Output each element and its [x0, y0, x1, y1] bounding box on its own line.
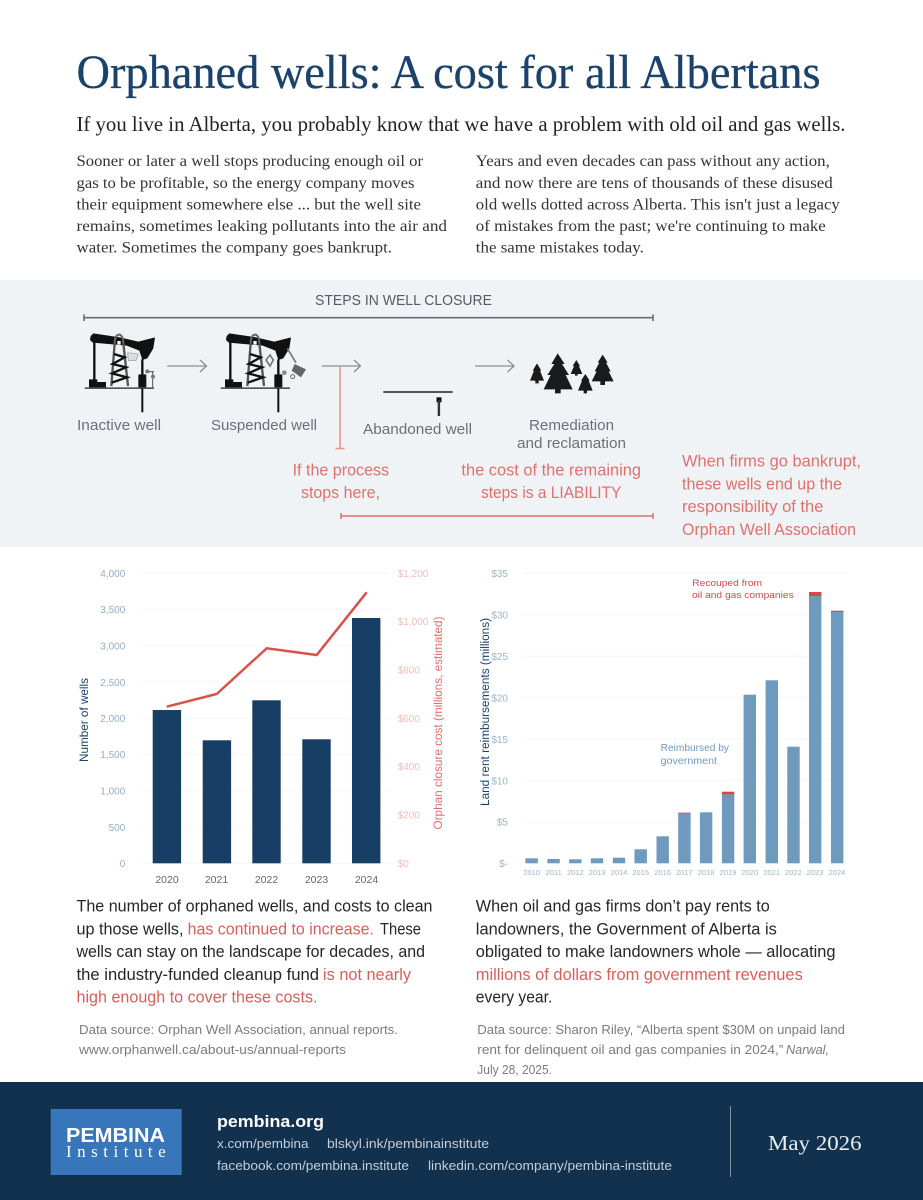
x axis labels: 2012: [567, 868, 584, 877]
text block: orphaned wells explanation: has continued to increase.: [188, 920, 374, 938]
text block: land rent explanation: millions of dollars from government revenues: [476, 966, 803, 984]
right axis labels: [398, 569, 429, 870]
date: May 2026: [768, 1131, 862, 1155]
arrow: abandoned to remediation: [475, 360, 514, 372]
data source: sharon riley narwal: Narwal,: [786, 1043, 829, 1057]
divider: [730, 1106, 731, 1177]
social links: linkedin.com/company/pembina-institute: [428, 1158, 672, 1173]
text block: orphaned wells explanation: [76, 898, 432, 1006]
left axis labels: 3,000: [100, 642, 126, 652]
x axis labels: 2011: [546, 868, 562, 877]
x axis labels: 2023: [807, 868, 823, 877]
text block: orphaned wells explanation: is not nearly: [323, 966, 412, 984]
y axis labels: $15: [491, 735, 508, 746]
y axis labels: [491, 569, 508, 870]
bars: number of wells: [153, 618, 380, 863]
bars: recouped from companies: [678, 592, 843, 813]
text block: orphaned wells explanation: These: [380, 920, 421, 938]
left axis labels: 0: [120, 859, 126, 870]
data source: sharon riley narwal: Data source: Sharon Riley, “Alberta spent $30M on unpaid land: [477, 1023, 845, 1037]
left axis labels: 2,000: [100, 714, 126, 725]
x axis labels: 2014: [611, 868, 627, 877]
intro text: left column: gas to be profitable, so the energy company moves: [76, 175, 414, 192]
intro text: left column: water. Sometimes the company goes bankrupt.: [76, 240, 392, 256]
panel: steps in well closure: [0, 280, 923, 547]
social links: blskyl.ink/pembinainstitute: [327, 1136, 489, 1151]
left axis labels: 500: [109, 823, 126, 834]
left axis labels: 2,500: [100, 678, 126, 689]
x axis labels: 2019: [720, 868, 736, 877]
left axis labels: [100, 569, 126, 870]
left axis labels: 4,000: [100, 569, 126, 580]
line: closure cost: [167, 592, 367, 707]
logo: pembina institute: PEMBINA: [66, 1125, 165, 1147]
icon: trees: [530, 353, 614, 393]
right axis labels: $1,200: [398, 569, 429, 580]
logo: pembina institute: Institute: [66, 1142, 166, 1161]
x axis labels: 2010: [523, 868, 540, 877]
arrow: inactive to suspended: [167, 360, 206, 372]
label: remediation and reclamation: and reclamation: [517, 435, 626, 452]
y axis labels: $25: [491, 652, 508, 663]
label: suspended well: Suspended well: [211, 417, 317, 434]
x axis labels: [523, 868, 845, 877]
callout: if the process stops here: If the process: [293, 462, 389, 480]
x axis labels: 2013: [589, 868, 605, 877]
x axis labels: 2015: [632, 868, 649, 877]
callout: when firms go bankrupt: [682, 453, 861, 539]
text block: land rent explanation: landowners, the Government of Alberta is: [476, 920, 777, 938]
text block: orphaned wells explanation: wells can stay on the landscape for decades, and: [76, 943, 425, 961]
x axis labels: 2022: [255, 874, 278, 886]
data source: sharon riley narwal: [477, 1023, 845, 1077]
x axis labels: 2024: [355, 874, 378, 886]
y axis labels: $35: [491, 569, 508, 580]
callout: when firms go bankrupt: these wells end up the: [682, 476, 842, 494]
arrow: suspended to abandoned: [322, 360, 360, 372]
intro text: right column: [476, 153, 840, 256]
y axis labels: $5: [497, 818, 508, 828]
text block: orphaned wells explanation: high enough to cover these costs.: [76, 988, 318, 1006]
marker: process stops here: [336, 366, 344, 448]
intro text: right column: the same mistakes today.: [476, 240, 644, 256]
data source: orphan well association: www.orphanwell.ca/about-us/annual-reports: [78, 1043, 346, 1057]
annotation: recouped from oil and gas companies: Recouped from: [692, 578, 762, 589]
text block: land rent explanation: When oil and gas firms don’t pay rents to: [476, 898, 770, 916]
title: Orphaned wells: A cost for all Albertans: [76, 46, 820, 99]
y axis labels: $20: [491, 694, 508, 704]
x axis labels: 2024: [829, 868, 845, 877]
right axis labels: $600: [398, 714, 420, 725]
subtitle: If you live in Alberta, you probably know that we have a problem with old oil and gas wells.: [76, 112, 846, 136]
x axis labels: 2021: [205, 874, 228, 886]
label: abandoned well: Abandoned well: [363, 421, 472, 438]
callout: when firms go bankrupt: Orphan Well Association: [682, 521, 856, 539]
icon: abandoned well: [383, 391, 453, 416]
axis title: land rent reimbursements: Land rent reimbursements (millions): [480, 618, 492, 806]
data source: orphan well association: [78, 1023, 398, 1057]
annotation: reimbursed by government: Reimbursed by: [661, 743, 729, 754]
heading: steps in well closure: STEPS IN WELL CLOSURE: [315, 292, 492, 309]
annotation: reimbursed by government: government: [661, 756, 717, 767]
right axis labels: $1,000: [398, 617, 429, 628]
x axis labels: 2023: [305, 874, 328, 886]
x axis labels: 2020: [155, 874, 179, 886]
x axis labels: [155, 874, 378, 886]
axis title: number of wells: Number of wells: [77, 678, 91, 762]
text block: orphaned wells explanation: the industry-funded cleanup fund: [76, 966, 319, 984]
icon: inactive well pumpjack: [85, 333, 155, 412]
callout: if the process stops here: [293, 462, 389, 502]
label: inactive well: Inactive well: [77, 417, 161, 434]
x axis labels: 2021: [763, 868, 780, 877]
annotation: recouped from oil and gas companies: [692, 578, 794, 601]
annotation: reimbursed by government: [661, 743, 729, 767]
social links: x.com/pembina: [217, 1136, 309, 1151]
intro text: left column: remains, sometimes leaking pollutants into the air and: [76, 218, 447, 235]
callout: cost of remaining steps is a liability: steps is a LIABILITY: [481, 484, 621, 502]
label: remediation and reclamation: [517, 417, 626, 452]
text block: orphaned wells explanation: The number of orphaned wells, and costs to clean: [76, 898, 432, 916]
chart: land rent reimbursements: [480, 569, 848, 877]
callout: when firms go bankrupt: When firms go bankrupt,: [682, 453, 861, 471]
right axis labels: $400: [398, 762, 420, 773]
intro text: right column: and now there are tens of thousands of these disused: [476, 175, 833, 192]
callout: cost of remaining steps is a liability: the cost of the remaining: [461, 462, 641, 480]
intro text: right column: Years and even decades can pass without any action,: [476, 153, 830, 170]
intro text: right column: of mistakes from the past; we're continuing to make: [476, 218, 826, 235]
data source: sharon riley narwal: rent for delinquent oil and gas companies in 2024,”: [477, 1043, 783, 1057]
bracket: steps span: [84, 314, 653, 321]
social links: [217, 1136, 672, 1173]
left axis labels: 1,500: [100, 750, 126, 761]
chart: orphaned wells and closure cost: [77, 569, 445, 886]
y axis labels: $30: [491, 610, 508, 622]
right axis labels: $800: [398, 666, 420, 676]
website: pembina.org: [217, 1112, 324, 1131]
footer: [0, 1082, 923, 1200]
right axis labels: $0: [398, 859, 409, 870]
icon: suspended well pumpjack with lock: [221, 333, 306, 412]
x axis labels: 2020: [741, 868, 758, 877]
text block: land rent explanation: obligated to make landowners whole — allocating: [476, 943, 836, 961]
left axis labels: 3,500: [100, 605, 126, 616]
text block: land rent explanation: every year.: [476, 988, 552, 1006]
y axis labels: $-: [499, 859, 508, 870]
data source: sharon riley narwal: July 28, 2025.: [477, 1063, 552, 1077]
callout: if the process stops here: stops here,: [301, 484, 380, 502]
text block: land rent explanation: [476, 898, 836, 1006]
intro text: left column: Sooner or later a well stops producing enough oil or: [76, 153, 424, 170]
x axis labels: 2022: [785, 868, 802, 877]
callout: when firms go bankrupt: responsibility of the: [682, 498, 823, 516]
social links: facebook.com/pembina.institute: [217, 1158, 409, 1173]
intro text: left column: [76, 153, 447, 256]
intro text: left column: their equipment somewhere else ... but the well site: [76, 196, 421, 214]
annotation: recouped from oil and gas companies: oil and gas companies: [692, 590, 794, 601]
right axis labels: $200: [398, 810, 420, 822]
x axis labels: 2017: [676, 868, 693, 877]
label: remediation and reclamation: Remediation: [529, 417, 614, 434]
data source: orphan well association: Data source: Orphan Well Association, annual reports.: [79, 1023, 398, 1037]
intro text: right column: old wells dotted across Alberta. This isn't just a legacy: [476, 196, 840, 214]
x axis labels: 2018: [698, 868, 714, 877]
bracket: liability span: [341, 513, 653, 519]
text block: orphaned wells explanation: up those wells,: [76, 920, 184, 938]
y axis labels: $10: [491, 776, 508, 788]
bars: reimbursed by government: [525, 596, 843, 863]
callout: cost of remaining steps is a liability: [461, 462, 641, 502]
axis title: orphan closure cost: Orphan closure cost (millions, estimated): [431, 616, 445, 830]
logo: pembina institute: [51, 1109, 182, 1175]
x axis labels: 2016: [654, 868, 671, 877]
left axis labels: 1,000: [100, 786, 126, 798]
